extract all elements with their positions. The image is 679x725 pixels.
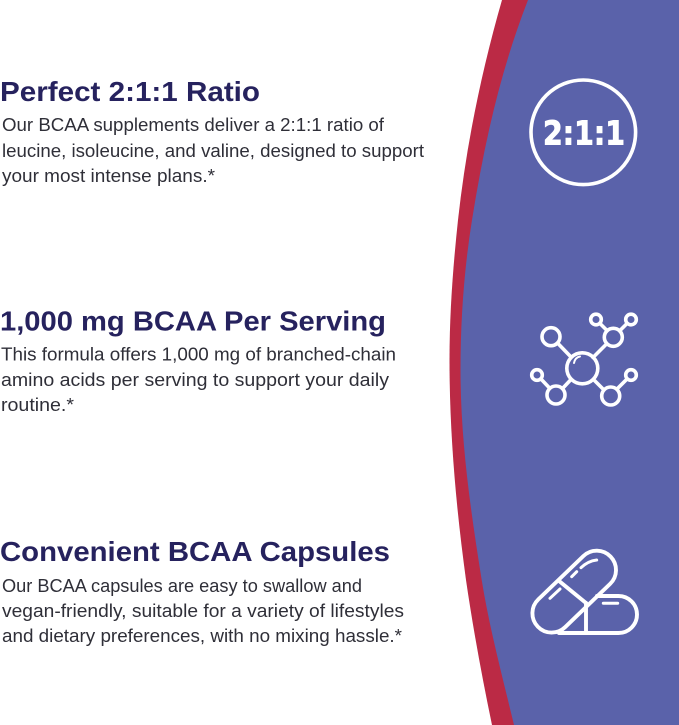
section: serving [0, 306, 396, 415]
section: capsules [0, 536, 404, 646]
text block: serving description: This formula offers 1,000 mg of branched-chain [1, 344, 396, 364]
text block: capsules description: Our BCAA capsules are easy to swallow and [2, 576, 362, 596]
icon: 2:1:1 badge [531, 80, 636, 185]
heading: Convenient BCAA Capsules: Convenient BCAA Capsules [0, 536, 390, 567]
red curved band [450, 0, 679, 725]
text block: serving description: amino acids per serving to support your daily [1, 370, 389, 390]
text block: ratio description: your most intense plans.* [2, 166, 215, 186]
icon: capsules [532, 551, 637, 633]
text block: serving description: routine.* [1, 395, 74, 415]
text block: capsules description: vegan-friendly, suitable for a variety of lifestyles [2, 601, 404, 621]
text block: capsules description: and dietary preferences, with no mixing hassle.* [2, 626, 402, 646]
icon: 2:1:1 badge: 2:1:1 [543, 114, 625, 152]
section: perfect ratio [0, 76, 424, 186]
text block: capsules description [2, 576, 404, 646]
blue panel [460, 0, 679, 725]
text block: ratio description: leucine, isoleucine, and valine, designed to support [2, 141, 424, 161]
text block: ratio description [2, 115, 424, 186]
text block: serving description [1, 344, 396, 415]
text block: ratio description: Our BCAA supplements deliver a 2:1:1 ratio of [2, 115, 385, 135]
icon: molecule [532, 314, 636, 405]
heading: 1,000 mg BCAA Per Serving: 1,000 mg BCAA Per Serving [0, 306, 386, 336]
heading: Perfect 2:1:1 Ratio: Perfect 2:1:1 Ratio [0, 76, 260, 107]
